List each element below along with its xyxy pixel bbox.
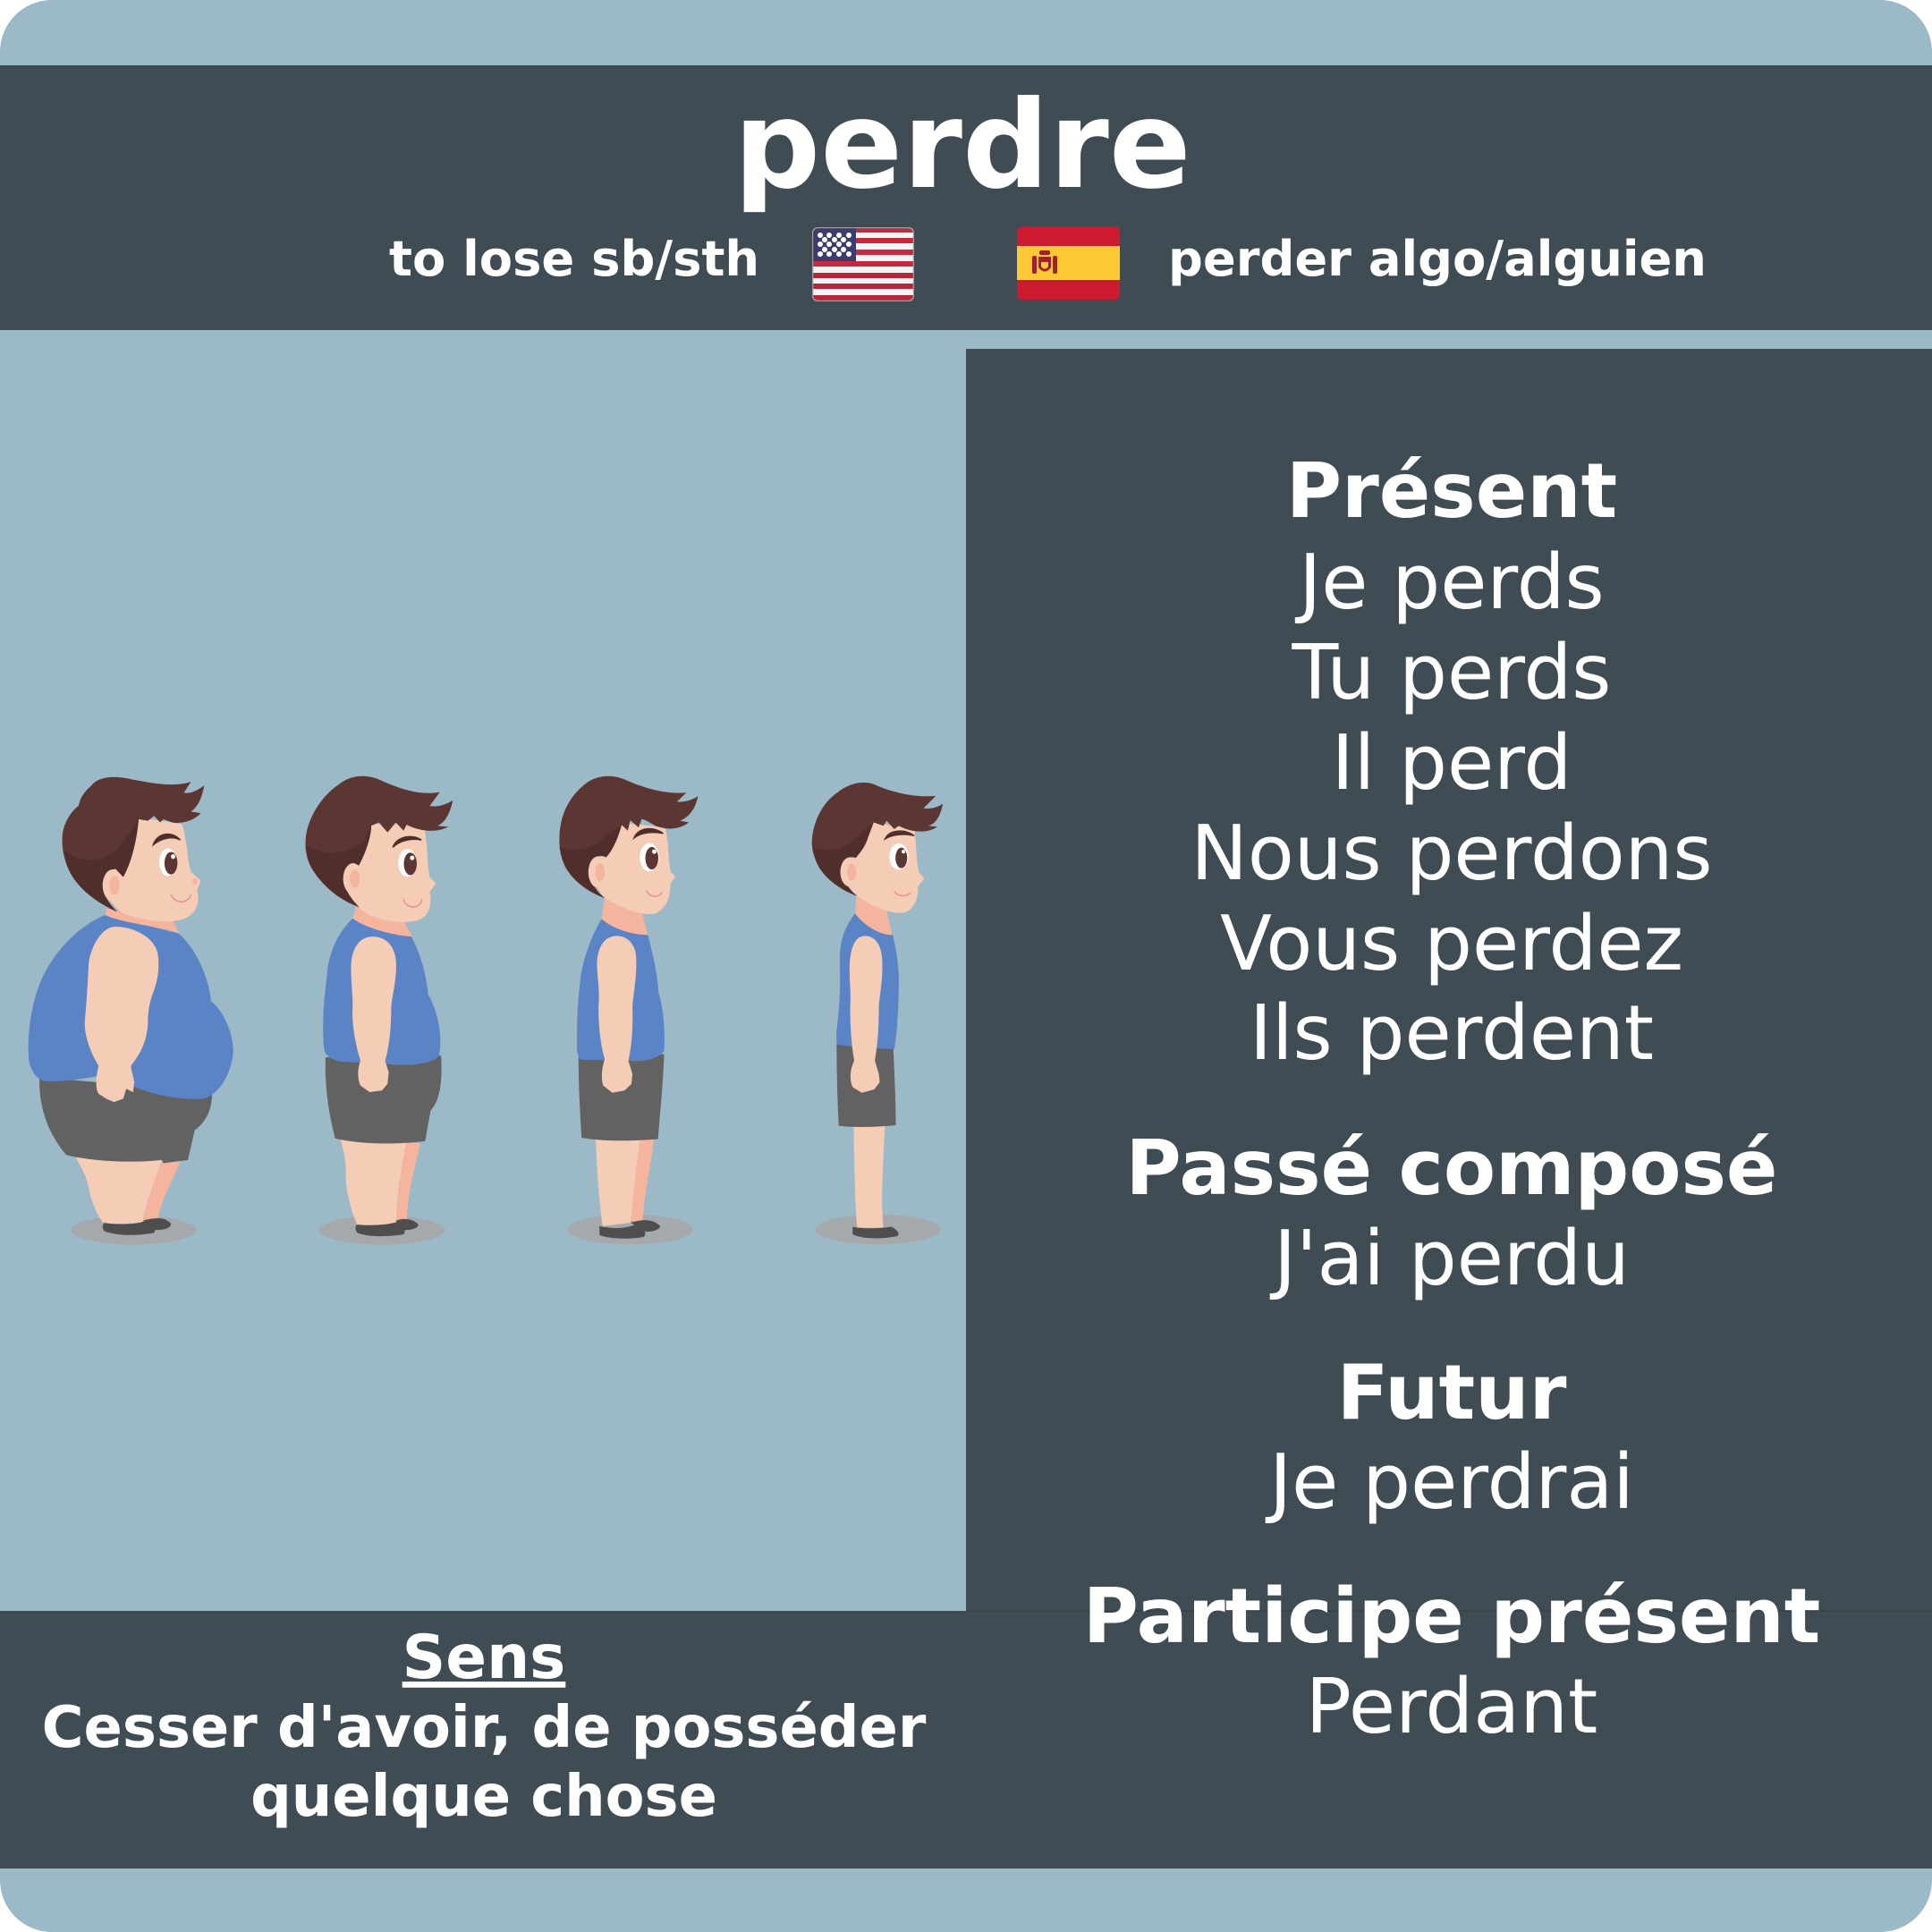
present forms: Nous perdons: [1191, 809, 1713, 897]
icon: US flag: [812, 227, 914, 301]
figure 3: slimmer: [559, 776, 698, 1244]
title: perdre: [733, 74, 1191, 216]
present forms: Il perd: [1332, 718, 1572, 807]
passé composé form: J'ai perdu: [1269, 1214, 1630, 1302]
panel: meaning: quelque chose: [250, 1764, 717, 1830]
present forms: Vous perdez: [1220, 899, 1683, 987]
heading: passé composé: Passé composé: [1126, 1123, 1777, 1212]
icon: Spanish flag: [1017, 226, 1120, 300]
panel: conjugations: [966, 349, 1932, 1868]
participe form: Perdant: [1306, 1662, 1597, 1750]
figure 2: overweight: [306, 776, 453, 1245]
English translation: to lose sb/sth: [389, 231, 759, 287]
panel: meaning: [0, 1611, 966, 1868]
present forms: Tu perds: [1292, 628, 1612, 716]
definition: Cesser d'avoir, de posséder: [42, 1695, 927, 1761]
illustration: boy losing weight: [29, 776, 943, 1245]
heading: present: Présent: [1286, 446, 1617, 535]
futur form: Je perdrai: [1265, 1437, 1634, 1526]
Spanish translation: perder algo/alguien: [1168, 231, 1707, 287]
present forms: [1191, 538, 1713, 1077]
panel: header: [0, 65, 1932, 330]
present forms: Ils perdent: [1250, 988, 1654, 1077]
heading: futur: Futur: [1337, 1348, 1567, 1436]
figure 1: heaviest: [29, 777, 233, 1245]
heading: sens: Sens: [402, 1622, 565, 1692]
present forms: Je perds: [1294, 538, 1605, 626]
figure 4: slimmest: [812, 783, 943, 1244]
heading: participe présent: Participe présent: [1083, 1572, 1820, 1660]
